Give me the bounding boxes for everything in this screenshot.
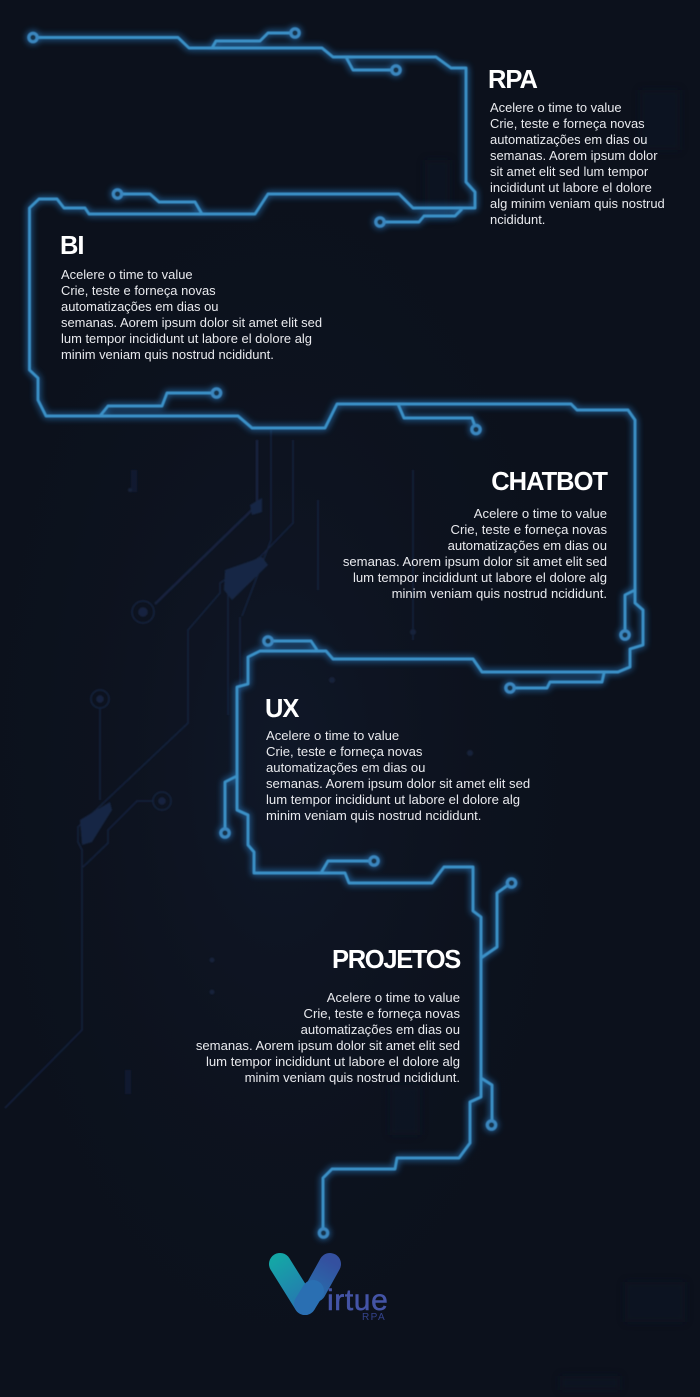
logo: Virtue RPA: RPA xyxy=(362,1312,386,1323)
heading: RPA: RPA xyxy=(488,66,537,94)
heading: UX: UX xyxy=(265,695,298,723)
section: UX xyxy=(265,695,530,823)
section: PROJETOS xyxy=(196,946,460,1085)
text: CHATBOT description: Acelere o time to value Crie, teste e forneça novas automatizações em dias ou semanas. Aorem ipsum dolor sit amet elit sed lum tempor incididunt ut labore el dolore alg minim veniam quis nostrud ncididunt. xyxy=(343,506,607,601)
section: RPA xyxy=(488,66,665,227)
text: PROJETOS description: Acelere o time to value Crie, teste e forneça novas automatizações em dias ou semanas. Aorem ipsum dolor sit amet elit sed lum tempor incididunt ut labore el dolore alg minim veniam quis nostrud ncididunt. xyxy=(196,990,460,1085)
logo: Virtue RPA xyxy=(269,1253,388,1323)
heading: BI: BI xyxy=(60,232,84,260)
heading: PROJETOS: PROJETOS xyxy=(332,946,460,974)
text: BI description: Acelere o time to value Crie, teste e forneça novas automatizações em dias ou semanas. Aorem ipsum dolor sit amet elit sed lum tempor incididunt ut labore el dolore alg minim veniam quis nostrud ncididunt. xyxy=(61,267,322,362)
heading: CHATBOT: CHATBOT xyxy=(491,468,607,496)
logo: Virtue RPA: irtue xyxy=(327,1284,388,1317)
text: UX description: Acelere o time to value Crie, teste e forneça novas automatizações em dias ou semanas. Aorem ipsum dolor sit amet elit sed lum tempor incididunt ut labore el dolore alg minim veniam quis nostrud ncididunt. xyxy=(266,728,530,823)
section: CHATBOT xyxy=(343,468,608,601)
section: BI xyxy=(60,232,322,362)
text: RPA description: Acelere o time to value Crie, teste e forneça novas automatizações em dias ou semanas. Aorem ipsum dolor sit amet elit sed lum tempor incididunt ut labore el dolore alg minim veniam quis nostrud ncididunt. xyxy=(490,100,665,227)
